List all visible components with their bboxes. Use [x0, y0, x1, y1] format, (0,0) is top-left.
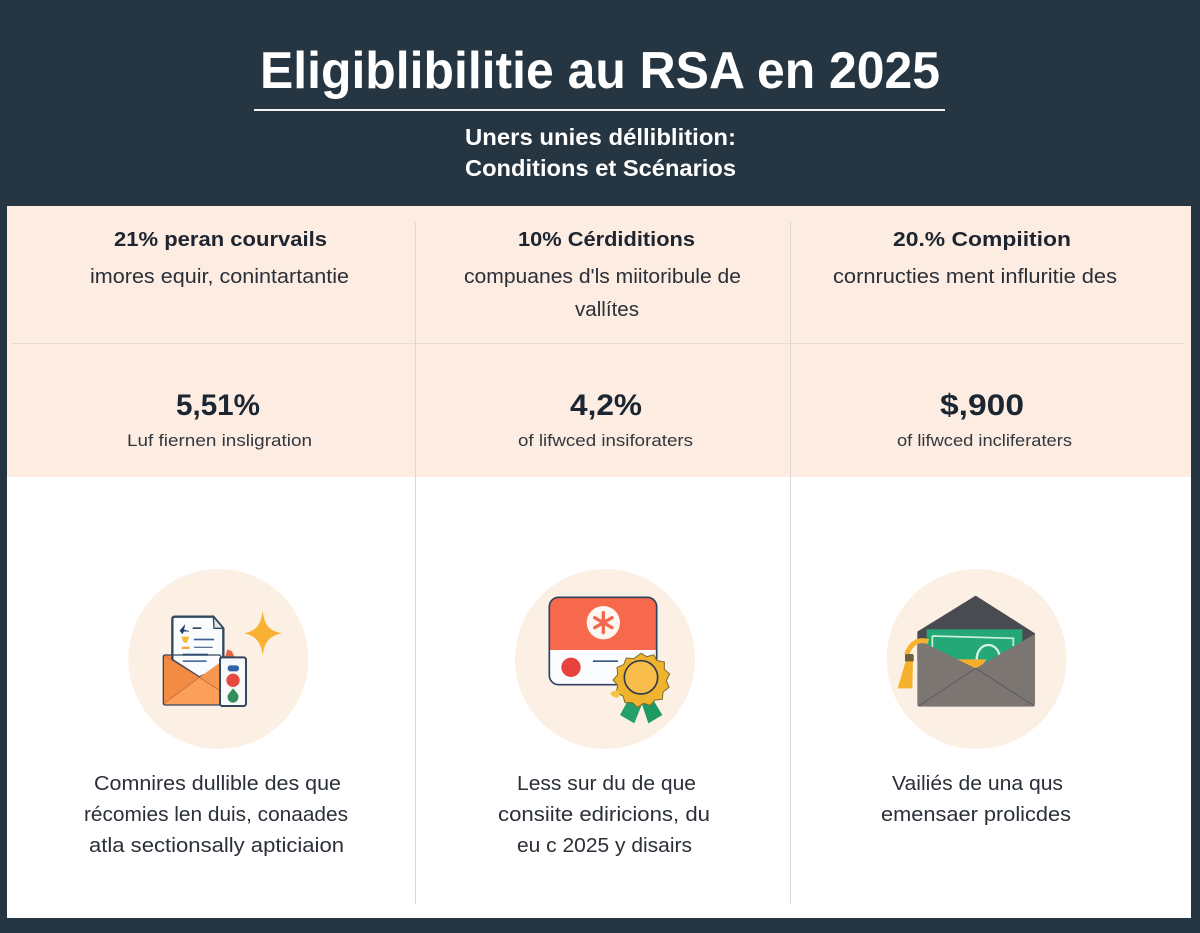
panel: white card — [7, 206, 1191, 918]
icon: envelope with document and star — [128, 569, 308, 749]
column 2 stat: 4,2% — [570, 389, 642, 422]
column 1 body text: Comnires dullible des que — [94, 773, 341, 795]
column 2 description: compuanes d'ls miitoribule de — [464, 266, 741, 288]
column 2 description: vallítes — [575, 299, 639, 321]
column 3 description: cornructies ment influritie des — [833, 266, 1117, 288]
column 3 body text: Vailiés de una qus — [892, 773, 1063, 795]
panel: peach stats band — [7, 206, 1191, 477]
title: Eligiblibilitie au RSA en 2025 — [260, 42, 940, 100]
column 1 stat label: Luf fiernen insligration — [127, 431, 312, 450]
column 2 body text: consiite ediricions, du — [498, 804, 710, 826]
column 2 body text — [498, 773, 710, 857]
subtitle: Conditions et Scénarios — [465, 155, 736, 181]
column 1 body text: atla sectionsally apticiaion — [89, 835, 344, 857]
column 2 heading: 10% Cérdiditions — [518, 229, 695, 251]
subtitle: Uners unies délliblition: — [465, 124, 736, 150]
column 3 body text: emensaer prolicdes — [881, 804, 1071, 826]
icon: certificate card with rosette — [515, 569, 695, 749]
icon: envelope with banknote and tassel — [887, 569, 1067, 749]
column 1 body text — [84, 773, 348, 857]
column 2 body text: Less sur du de que — [517, 773, 696, 795]
column 3 stat: $,900 — [940, 389, 1024, 422]
column 1 description: imores equir, conintartantie — [90, 266, 349, 288]
column 1 stat: 5,51% — [176, 389, 260, 422]
column 1 body text: récomies len duis, conaades — [84, 804, 348, 826]
column 3 heading: 20.% Compiition — [893, 229, 1071, 251]
subtitle — [465, 124, 736, 181]
column 2 stat label: of lifwced insiforaters — [518, 431, 693, 450]
column 2 description — [464, 266, 741, 321]
column 3 stat label: of lifwced incliferaters — [897, 431, 1072, 450]
column 1 heading: 21% peran courvails — [114, 229, 327, 251]
column 3 body text — [881, 773, 1071, 826]
column 2 body text: eu c 2025 y disairs — [517, 835, 692, 857]
